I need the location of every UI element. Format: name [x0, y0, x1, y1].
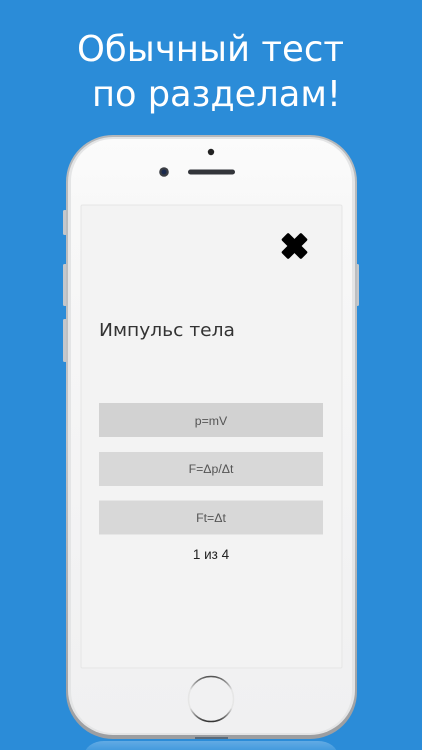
camera: [159, 167, 169, 177]
home button: [188, 676, 234, 722]
phone reflection: [84, 741, 338, 750]
earpiece dot: [208, 149, 214, 155]
title: [77, 29, 344, 115]
title: по разделам!: [92, 74, 341, 115]
screen: [81, 205, 342, 668]
phone face: [71, 139, 352, 733]
phone frame: [66, 135, 357, 739]
answer option 3: [99, 500, 323, 534]
question heading: Импульс тела: [99, 321, 235, 341]
answer option 2: F=Δp/Δt: [189, 462, 234, 476]
answer option 1: [99, 403, 323, 437]
title: Обычный тест: [77, 29, 344, 70]
phone: [63, 135, 359, 739]
answer option 3: Ft=Δt: [196, 511, 226, 525]
side buttons: [63, 210, 359, 362]
answer option 2: [99, 452, 323, 486]
answer option 1: p=mV: [195, 414, 228, 428]
close icon: [281, 233, 308, 259]
home button shadow line: [195, 737, 228, 739]
phone inner bezel: [68, 137, 355, 735]
speaker: [188, 170, 235, 174]
progress counter: 1 из 4: [193, 547, 230, 562]
